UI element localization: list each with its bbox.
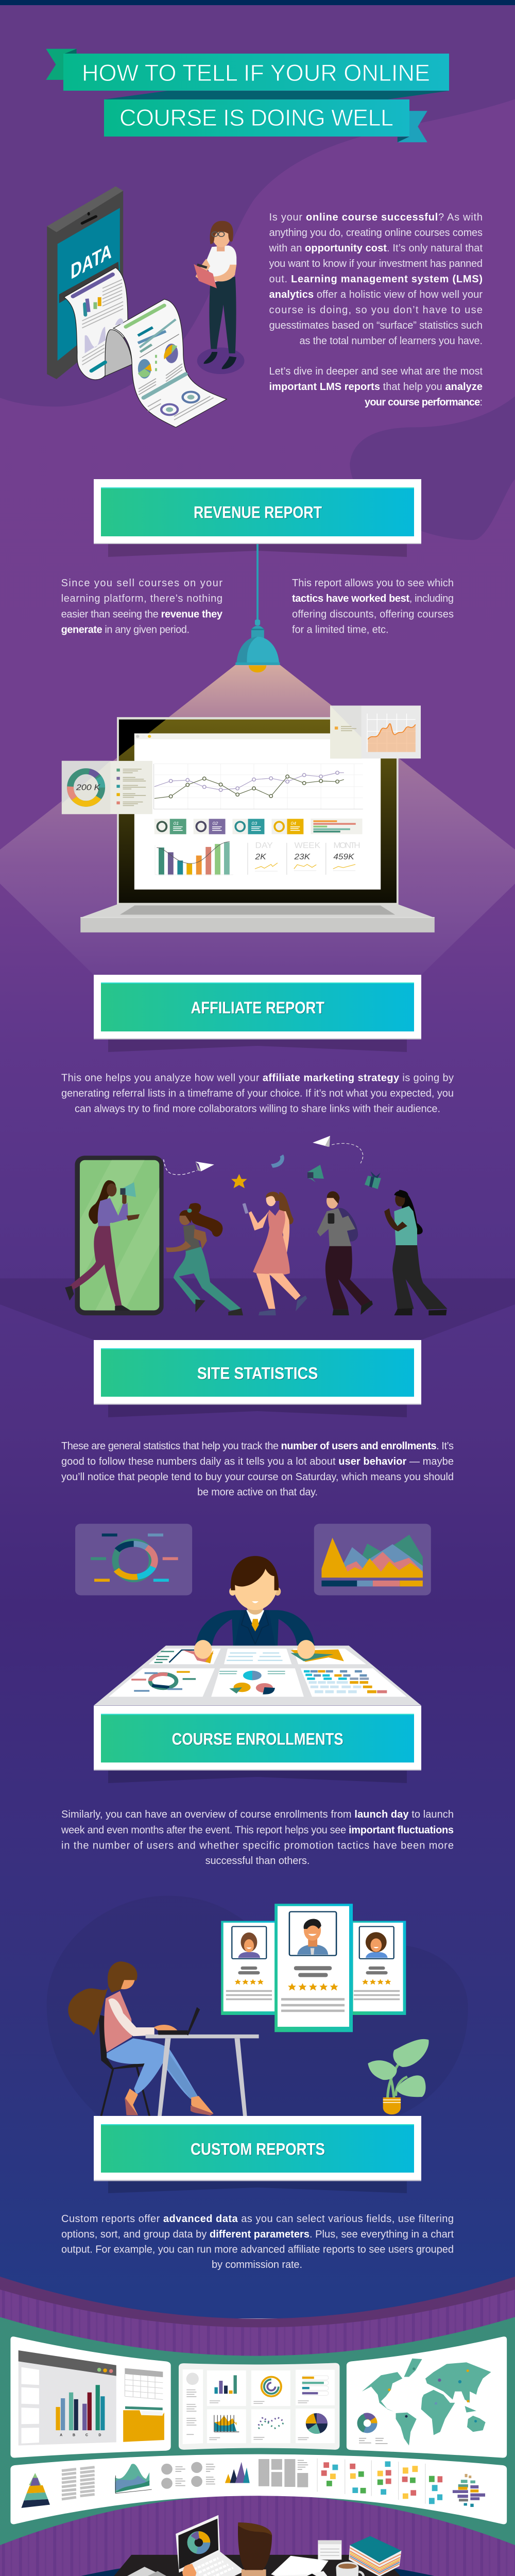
section banner: course enrollments: COURSE ENROLLMENTS (172, 1730, 344, 1749)
panel: donut chart (75, 1524, 192, 1596)
intro text: out. Learning management system (LMS) (269, 274, 483, 285)
illustration: laptop with revenue dashboard: DAY (255, 841, 273, 850)
revenue text right: This report allows you to see which (292, 578, 454, 589)
illustration: laptop with revenue dashboard: WEEK (294, 841, 320, 850)
floor band (0, 1278, 515, 1340)
custom reports text: options, sort, and group data by different parameters. Plus, see everything in a chart (61, 2229, 454, 2240)
left screen: B (73, 2433, 75, 2437)
card: area chart (330, 706, 421, 758)
illustration: laptop with revenue dashboard: 459K (333, 853, 355, 861)
custom reports text: Custom reports offer advanced data as you can select various fields, use filtering (61, 2213, 454, 2225)
left screen (10, 2336, 171, 2458)
revenue text right (292, 578, 454, 636)
intro text: with an opportunity cost. It’s only natural that (269, 243, 483, 254)
site statistics text (61, 1440, 454, 1498)
title ribbon (46, 49, 450, 142)
revenue text left (61, 578, 223, 636)
course enrollments text: in the number of users and whether specific promotion tactics have been more (61, 1840, 454, 1852)
left screen: C (85, 2433, 88, 2437)
affiliate text: can always try to find more collaborators willing to share links with their audience. (75, 1104, 440, 1115)
site statistics text: These are general statistics that help you track the number of users and enrollments. It’s (61, 1440, 454, 1452)
revenue text right: tactics have worked best, including (292, 593, 454, 604)
site statistics text: you’ll notice that people tend to buy your course on Saturday, which means you should (61, 1471, 454, 1483)
revenue text right: offering discounts, offering courses (292, 609, 454, 620)
custom reports text (61, 2213, 454, 2270)
illustration: laptop with revenue dashboard: 01 (174, 821, 179, 826)
right screen: world map (347, 2336, 507, 2458)
illustration: laptop with revenue dashboard (80, 717, 435, 933)
section banner: course enrollments (94, 1706, 421, 1783)
intro text: you want to know if your investment has panned (269, 258, 483, 269)
section banner: revenue report (94, 479, 421, 557)
section banner: affiliate report (94, 975, 421, 1052)
illustration: control room scene (0, 2277, 515, 2576)
icon: ceiling lamp (235, 544, 280, 672)
illustration: man at dashboard table (94, 1556, 421, 1706)
lower strip of charts (10, 2454, 507, 2524)
section banner: custom reports (94, 2116, 421, 2193)
illustration: affiliate crowd (65, 1136, 448, 1315)
intro text: as the total number of learners you have. (300, 335, 483, 347)
intro text: analytics offer a holistic view of how well your (269, 289, 483, 300)
section banner: revenue report: REVENUE REPORT (194, 503, 322, 521)
illustration: phone printing data report with woman: DATA (71, 239, 112, 284)
illustration: laptop with revenue dashboard: 02 (213, 821, 218, 826)
illustration: laptop with revenue dashboard: 2K (255, 853, 267, 861)
intro text: your course performance: (365, 397, 483, 408)
title ribbon: COURSE IS DOING WELL (119, 105, 393, 131)
section banner: affiliate report: AFFILIATE REPORT (191, 998, 324, 1017)
custom reports text: by commission rate. (212, 2259, 302, 2270)
title ribbon: HOW TO TELL IF YOUR ONLINE (82, 60, 430, 86)
left screen: D (98, 2433, 101, 2437)
intro text: Is your online course successful? As with (269, 212, 483, 223)
revenue text left: Since you sell courses on your (61, 578, 222, 589)
revenue text left: learning platform, there’s nothing (61, 593, 222, 604)
intro text: course is doing, so you don’t have to use (269, 304, 483, 316)
desk with man and laptop (93, 2515, 424, 2576)
site statistics text: be more active on that day. (197, 1487, 318, 1498)
course enrollments text: week and even months after the event. This report helps you see important fluctuations (61, 1825, 454, 1836)
course enrollments text (61, 1809, 454, 1867)
section banner: site statistics (94, 1340, 421, 1417)
light beam from lamp (0, 665, 515, 975)
middle screen (179, 2363, 339, 2450)
section banner: custom reports: CUSTOM REPORTS (191, 2140, 325, 2159)
custom reports text: output. For example, you can run more advanced affiliate reports to see users grouped (61, 2244, 454, 2256)
course enrollments text: Similarly, you can have an overview of course enrollments from launch day to launch (61, 1809, 454, 1820)
revenue text left: easier than seeing the revenue they (61, 609, 223, 620)
affiliate text: generating referral lists in a timeframe of your choice. If it’s not what you expected, you (61, 1088, 454, 1099)
intro text: Let’s dive in deeper and see what are the most (269, 366, 483, 377)
intro text: important LMS reports that help you analyze (269, 381, 483, 393)
card: donut 200K: 200 K (76, 783, 100, 792)
revenue text left: generate in any given period. (61, 624, 190, 636)
section banner: site statistics: SITE STATISTICS (197, 1364, 318, 1383)
illustration: laptop with revenue dashboard: 03 (252, 821, 257, 826)
panel: area chart (314, 1524, 431, 1596)
affiliate text: This one helps you analyze how well your affiliate marketing strategy is going by (61, 1073, 454, 1084)
intro text: guesstimates based on “surface” statistics such (269, 320, 483, 331)
course enrollments text: successful than others. (205, 1855, 310, 1867)
revenue text right: for a limited time, etc. (292, 624, 388, 636)
intro text (269, 212, 483, 408)
illustration: laptop with revenue dashboard: 04 (290, 821, 296, 826)
illustration: woman at desk with profile cards (47, 1896, 468, 2116)
left screen: A (60, 2433, 62, 2437)
intro text: anything you do, creating online courses comes (269, 227, 483, 239)
affiliate text (61, 1073, 454, 1115)
card: donut 200K (62, 761, 152, 814)
illustration: laptop with revenue dashboard: 23K (294, 853, 311, 861)
illustration: phone printing data report with woman (47, 187, 245, 427)
site statistics text: good to follow these numbers daily as it tells you a lot about user behavior — maybe (61, 1456, 454, 1467)
illustration: laptop with revenue dashboard: MONTH (333, 841, 360, 850)
